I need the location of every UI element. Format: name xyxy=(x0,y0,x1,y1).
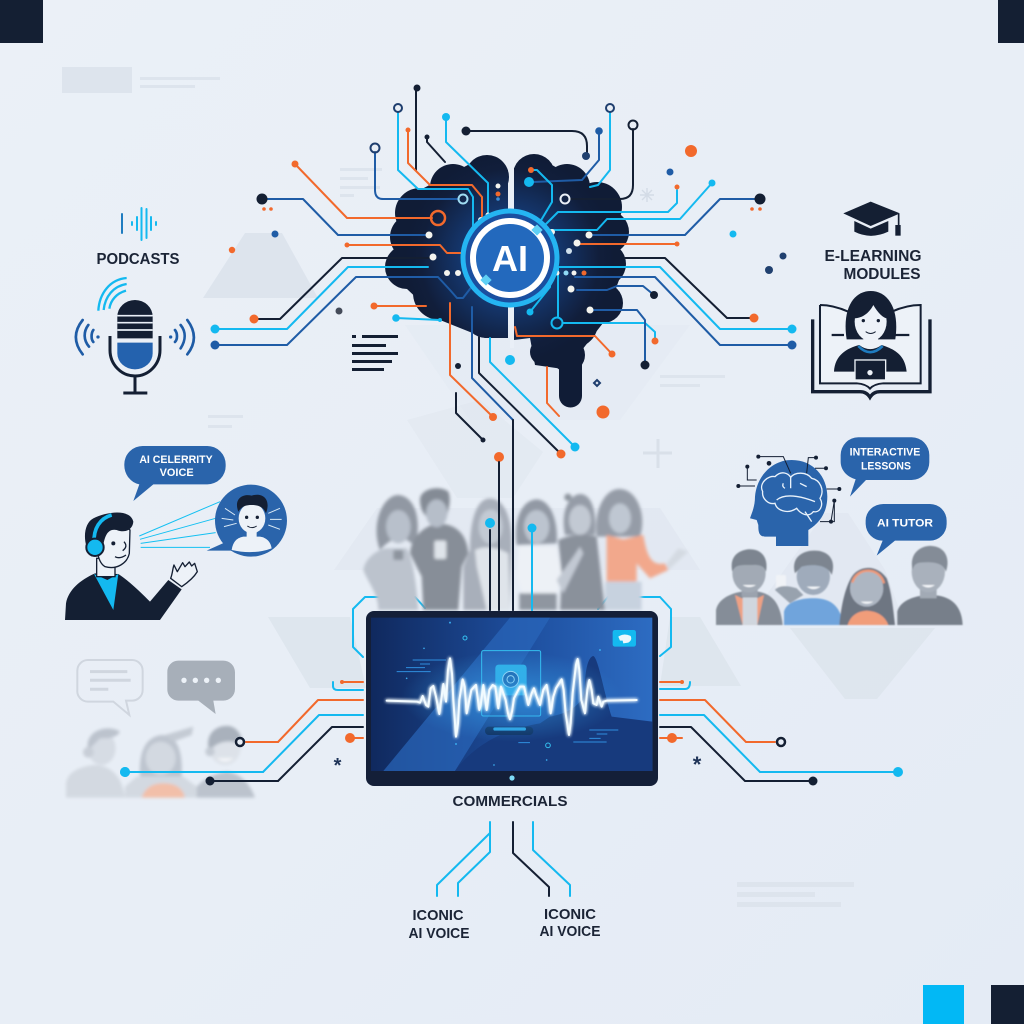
icon: asterisk right: * xyxy=(693,752,702,777)
speech bubble: AI celebrity voice: VOICE xyxy=(160,467,194,479)
voice beams xyxy=(139,502,220,547)
crowd person 2 xyxy=(410,488,468,610)
heading: podcasts: PODCASTS xyxy=(96,251,180,268)
device base xyxy=(485,727,533,735)
icon: asterisk left: * xyxy=(334,755,342,777)
logo tile xyxy=(613,630,636,647)
AI core badge xyxy=(463,211,557,305)
chat bubble filled xyxy=(167,661,235,714)
ghost people xyxy=(66,726,255,798)
heading: commercials: COMMERCIALS xyxy=(452,793,568,810)
icon: AI brain head xyxy=(736,455,841,546)
text lines icon xyxy=(352,335,398,371)
panel: interactive lessons and AI tutor xyxy=(716,437,963,625)
circuit wires xyxy=(125,90,898,896)
icon: microphone xyxy=(76,278,194,393)
student group xyxy=(716,546,963,625)
speech bubble: interactive lessons: INTERACTIVE xyxy=(850,447,921,459)
background ghost shapes xyxy=(62,67,935,907)
wires over ghost people xyxy=(125,742,278,781)
ring accent bottom left xyxy=(480,274,492,286)
crowd wire overlays xyxy=(490,462,532,610)
panel: crowd of people xyxy=(363,488,688,610)
brain right hemisphere xyxy=(513,154,629,408)
chat bubble outline xyxy=(77,660,143,715)
illustration: presenter with headset xyxy=(65,512,197,620)
screen sparkle dots xyxy=(406,622,601,766)
wire nodes over ghost people xyxy=(120,738,785,786)
wire end nodes xyxy=(120,84,903,786)
monitor screen xyxy=(371,618,652,771)
panel: podcasts xyxy=(76,208,194,393)
heading: e-learning modules: E-LEARNING xyxy=(824,248,922,265)
monitor: commercials xyxy=(366,611,658,786)
panel: AI celebrity voice xyxy=(65,446,287,620)
icon: graduation cap xyxy=(843,202,901,236)
icon: student with open book xyxy=(813,291,930,397)
AI label: AI xyxy=(492,238,528,279)
centre app frame xyxy=(482,651,541,716)
speech bubble: AI tutor xyxy=(866,504,947,556)
crowd person 4 xyxy=(516,499,562,610)
label: iconic AI voice left xyxy=(408,907,470,942)
speech bubble: AI celebrity voice xyxy=(124,446,226,501)
ring accent top right xyxy=(531,224,543,236)
label: iconic AI voice right: ICONIC xyxy=(544,906,596,923)
label: iconic AI voice left: ICONIC xyxy=(412,907,464,924)
brain left hemisphere xyxy=(385,155,509,338)
decorative plus xyxy=(643,439,672,468)
panel: e-learning modules: MODULES xyxy=(844,266,920,283)
icon: celebrity portrait xyxy=(207,485,287,557)
speech bubble: interactive lessons: LESSONS xyxy=(861,461,911,473)
speech bubble: AI celebrity voice: AI CELERRITY xyxy=(139,454,213,466)
monitor bezel xyxy=(366,611,658,786)
panel: ghosted audience and chat xyxy=(66,660,255,798)
crowd person 1 xyxy=(363,495,418,610)
crowd person 5 xyxy=(557,494,605,610)
waveform glow xyxy=(402,652,622,742)
label: iconic AI voice right: AI VOICE xyxy=(540,923,600,940)
screen detail lines xyxy=(397,636,618,748)
monitor power light xyxy=(509,775,515,781)
icon: snowflake xyxy=(640,188,654,202)
label: iconic AI voice left: AI VOICE xyxy=(408,925,470,942)
speech bubble: AI tutor: AI TUTOR xyxy=(877,517,933,529)
crowd person 3 xyxy=(463,498,512,610)
waveform xyxy=(387,658,637,737)
panel: e-learning modules xyxy=(813,202,930,397)
brain centre divider xyxy=(510,160,514,348)
crowd person 6 xyxy=(596,489,688,610)
brain xyxy=(385,154,629,408)
speech bubble: interactive lessons xyxy=(841,437,929,497)
crowd wire nodes xyxy=(485,518,536,532)
label: iconic AI voice right xyxy=(540,906,600,940)
icon: sound wave xyxy=(122,208,156,240)
